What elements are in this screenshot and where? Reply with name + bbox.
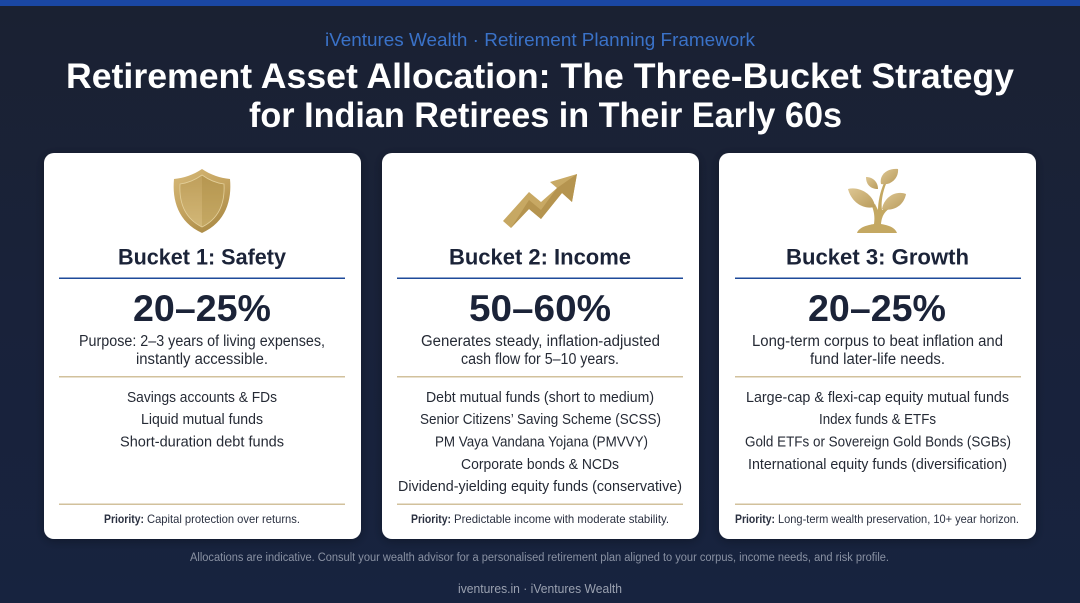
purpose: [79, 333, 325, 368]
percentage: 20–25%: [133, 288, 271, 329]
heading: Bucket 1: Safety: [118, 244, 286, 270]
percentage: 20–25%: [808, 288, 946, 329]
asset list: Gold ETFs or Sovereign Gold Bonds (SGBs): [745, 434, 1011, 450]
purpose: Long-term corpus to beat inflation and: [752, 333, 1003, 350]
title: Retirement Asset Allocation: The Three-Bucket Strategy: [66, 57, 1015, 96]
asset list: [398, 389, 682, 495]
asset list: Short-duration debt funds: [120, 434, 284, 450]
asset list: Corporate bonds & NCDs: [461, 456, 619, 473]
disclaimer: Allocations are indicative. Consult your wealth advisor for a personalised retirement plan aligned to your corpus, income needs, and risk profile.: [190, 552, 889, 564]
panel: bucket 1 safety: [44, 153, 361, 539]
footer: iventures.in · iVentures Wealth: [458, 582, 622, 596]
priority: Capital protection over returns.: [147, 512, 300, 526]
header: [66, 29, 1015, 135]
purpose: fund later-life needs.: [810, 351, 945, 368]
purpose: Generates steady, inflation-adjusted: [421, 333, 660, 350]
purpose: [421, 333, 660, 368]
asset list: International equity funds (diversification): [748, 456, 1007, 473]
priority: Priority:: [735, 512, 775, 526]
asset list: Senior Citizens’ Saving Scheme (SCSS): [420, 411, 661, 428]
icon: plant: [848, 169, 906, 233]
title: [66, 57, 1015, 135]
subtitle: iVentures Wealth · Retirement Planning Framework: [325, 29, 756, 50]
icon: rising arrow: [503, 174, 577, 228]
top accent bar: [0, 0, 1080, 6]
asset list: Large-cap & flexi-cap equity mutual funds: [746, 389, 1009, 406]
asset list: Savings accounts & FDs: [127, 389, 277, 406]
asset list: Dividend-yielding equity funds (conservative): [398, 478, 682, 495]
priority: Long-term wealth preservation, 10+ year horizon.: [778, 512, 1019, 526]
asset list: Index funds & ETFs: [819, 411, 936, 428]
asset list: Liquid mutual funds: [141, 411, 263, 428]
title: for Indian Retirees in Their Early 60s: [249, 96, 842, 135]
purpose: cash flow for 5–10 years.: [461, 351, 619, 368]
panel: bucket 2 income: [382, 153, 699, 539]
purpose: [752, 333, 1003, 368]
asset list: PM Vaya Vandana Yojana (PMVVY): [435, 434, 648, 450]
heading: Bucket 3: Growth: [786, 244, 969, 270]
priority: Priority:: [411, 512, 451, 526]
priority: Priority:: [104, 512, 144, 526]
heading: Bucket 2: Income: [449, 244, 631, 270]
icon: shield: [174, 169, 230, 233]
purpose: Purpose: 2–3 years of living expenses,: [79, 333, 325, 350]
percentage: 50–60%: [469, 288, 611, 329]
asset list: Debt mutual funds (short to medium): [426, 389, 654, 406]
asset list: [120, 389, 284, 450]
panel: bucket 3 growth: [719, 153, 1036, 539]
priority: Predictable income with moderate stability.: [454, 512, 669, 526]
purpose: instantly accessible.: [136, 351, 268, 368]
asset list: [745, 389, 1011, 473]
